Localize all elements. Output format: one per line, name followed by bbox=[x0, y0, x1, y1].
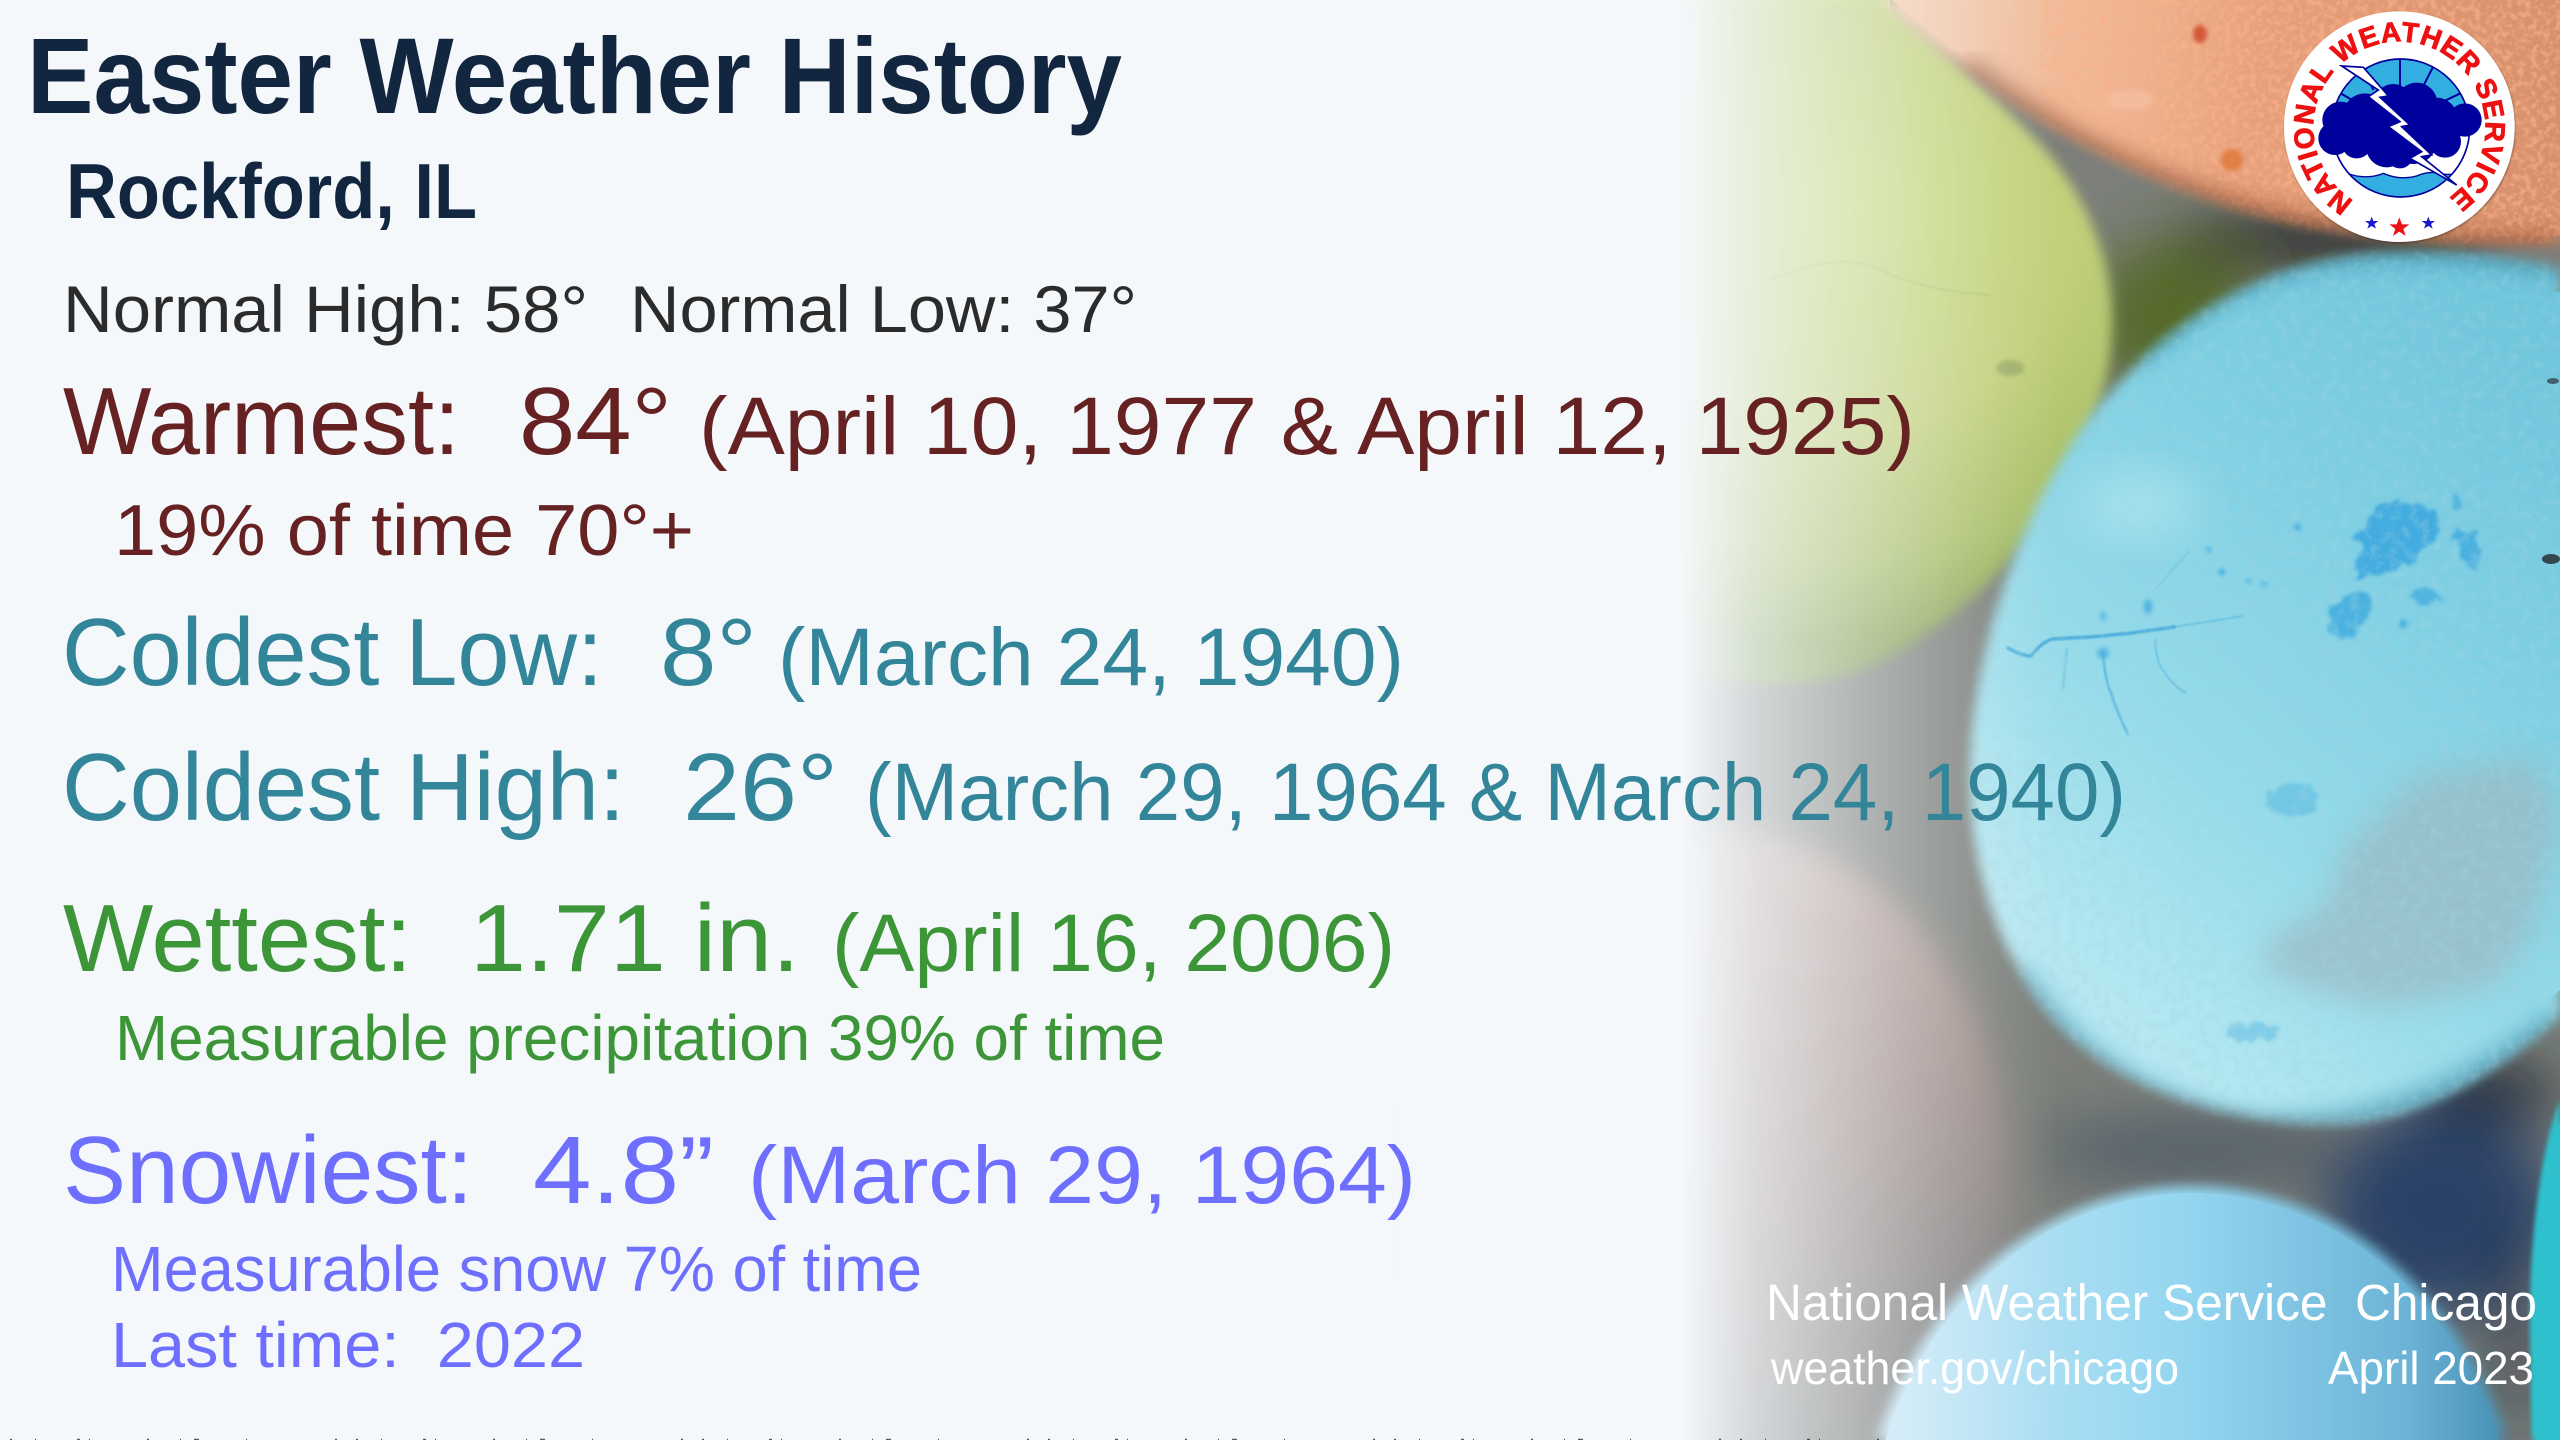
footer credits bbox=[1766, 1274, 2537, 1394]
record: coldest high: 26° bbox=[683, 734, 838, 841]
record: wettest bbox=[63, 885, 1395, 1074]
record: coldest low: (March 24, 1940) bbox=[778, 612, 1404, 703]
egg: orange bbox=[1880, 0, 2560, 252]
record: wettest: Measurable precipitation 39% of time bbox=[115, 1002, 1165, 1074]
logo disc bbox=[2284, 11, 2515, 242]
record: coldest low: 8° bbox=[660, 599, 757, 706]
egg: teal bbox=[2530, 1100, 2560, 1440]
record: snowiest: Snowiest: bbox=[63, 1117, 473, 1224]
footer credits: April 2023 bbox=[2328, 1342, 2534, 1394]
record: snowiest: (March 29, 1964) bbox=[748, 1130, 1416, 1221]
normals line bbox=[63, 272, 1137, 346]
record: coldest high: Coldest High: bbox=[62, 734, 625, 841]
logo ring text: NATIONAL WEATHER SERVICE bbox=[2294, 22, 2506, 216]
dye blots bbox=[2227, 498, 2478, 1042]
record: coldest high bbox=[62, 734, 2126, 841]
record: wettest: 1.71 in. bbox=[470, 885, 800, 992]
dye specks bbox=[2097, 524, 2301, 659]
NWS logo bbox=[2283, 11, 2517, 244]
white fade over photo bbox=[1400, 0, 2080, 1440]
egg: pink bbox=[1430, 830, 2010, 1440]
footer credits: weather.gov/chicago bbox=[1770, 1342, 2179, 1394]
record: warmest: Warmest: bbox=[63, 368, 460, 475]
egg surface grain bbox=[1970, 250, 2560, 1130]
record: wettest: Wettest: bbox=[63, 885, 412, 992]
footer credits: National Weather Service Chicago bbox=[1766, 1274, 2537, 1331]
photo: coloured Easter eggs bbox=[1693, 0, 2560, 1440]
record: warmest bbox=[63, 368, 1915, 571]
normals line: Normal Low: 37° bbox=[630, 272, 1137, 346]
grey mottled patch bbox=[2266, 757, 2560, 1009]
subtitle: location: Rockford, IL bbox=[66, 147, 477, 235]
record: snowiest: Last time: 2022 bbox=[111, 1309, 585, 1381]
egg: large blue bbox=[1970, 246, 2560, 1132]
logo emblem bbox=[2318, 57, 2482, 197]
egg: green bbox=[1640, 0, 2112, 684]
record: warmest: 84° bbox=[519, 368, 672, 475]
record: coldest low bbox=[62, 599, 1404, 706]
record: coldest low: Coldest Low: bbox=[62, 599, 603, 706]
logo stars bbox=[2365, 217, 2435, 236]
dye crack lines bbox=[2008, 550, 2243, 734]
lightning bolt bbox=[2342, 66, 2457, 185]
record: warmest: (April 10, 1977 & April 12, 1925) bbox=[699, 381, 1915, 472]
record: coldest high: (March 29, 1964 & March 24, 1940) bbox=[865, 747, 2126, 838]
title: Easter Weather History bbox=[27, 15, 1122, 136]
record: snowiest: 4.8” bbox=[533, 1117, 714, 1224]
record: snowiest bbox=[63, 1117, 1416, 1381]
egg: lower blue bbox=[1877, 1186, 2507, 1440]
egg rim shading bbox=[2010, 246, 2560, 1132]
cloud bbox=[2318, 83, 2482, 168]
normals line: Normal High: 58° bbox=[63, 272, 588, 346]
record: snowiest: Measurable snow 7% of time bbox=[111, 1233, 922, 1305]
record: warmest: 19% of time 70°+ bbox=[114, 491, 694, 571]
record: wettest: (April 16, 2006) bbox=[832, 898, 1395, 989]
